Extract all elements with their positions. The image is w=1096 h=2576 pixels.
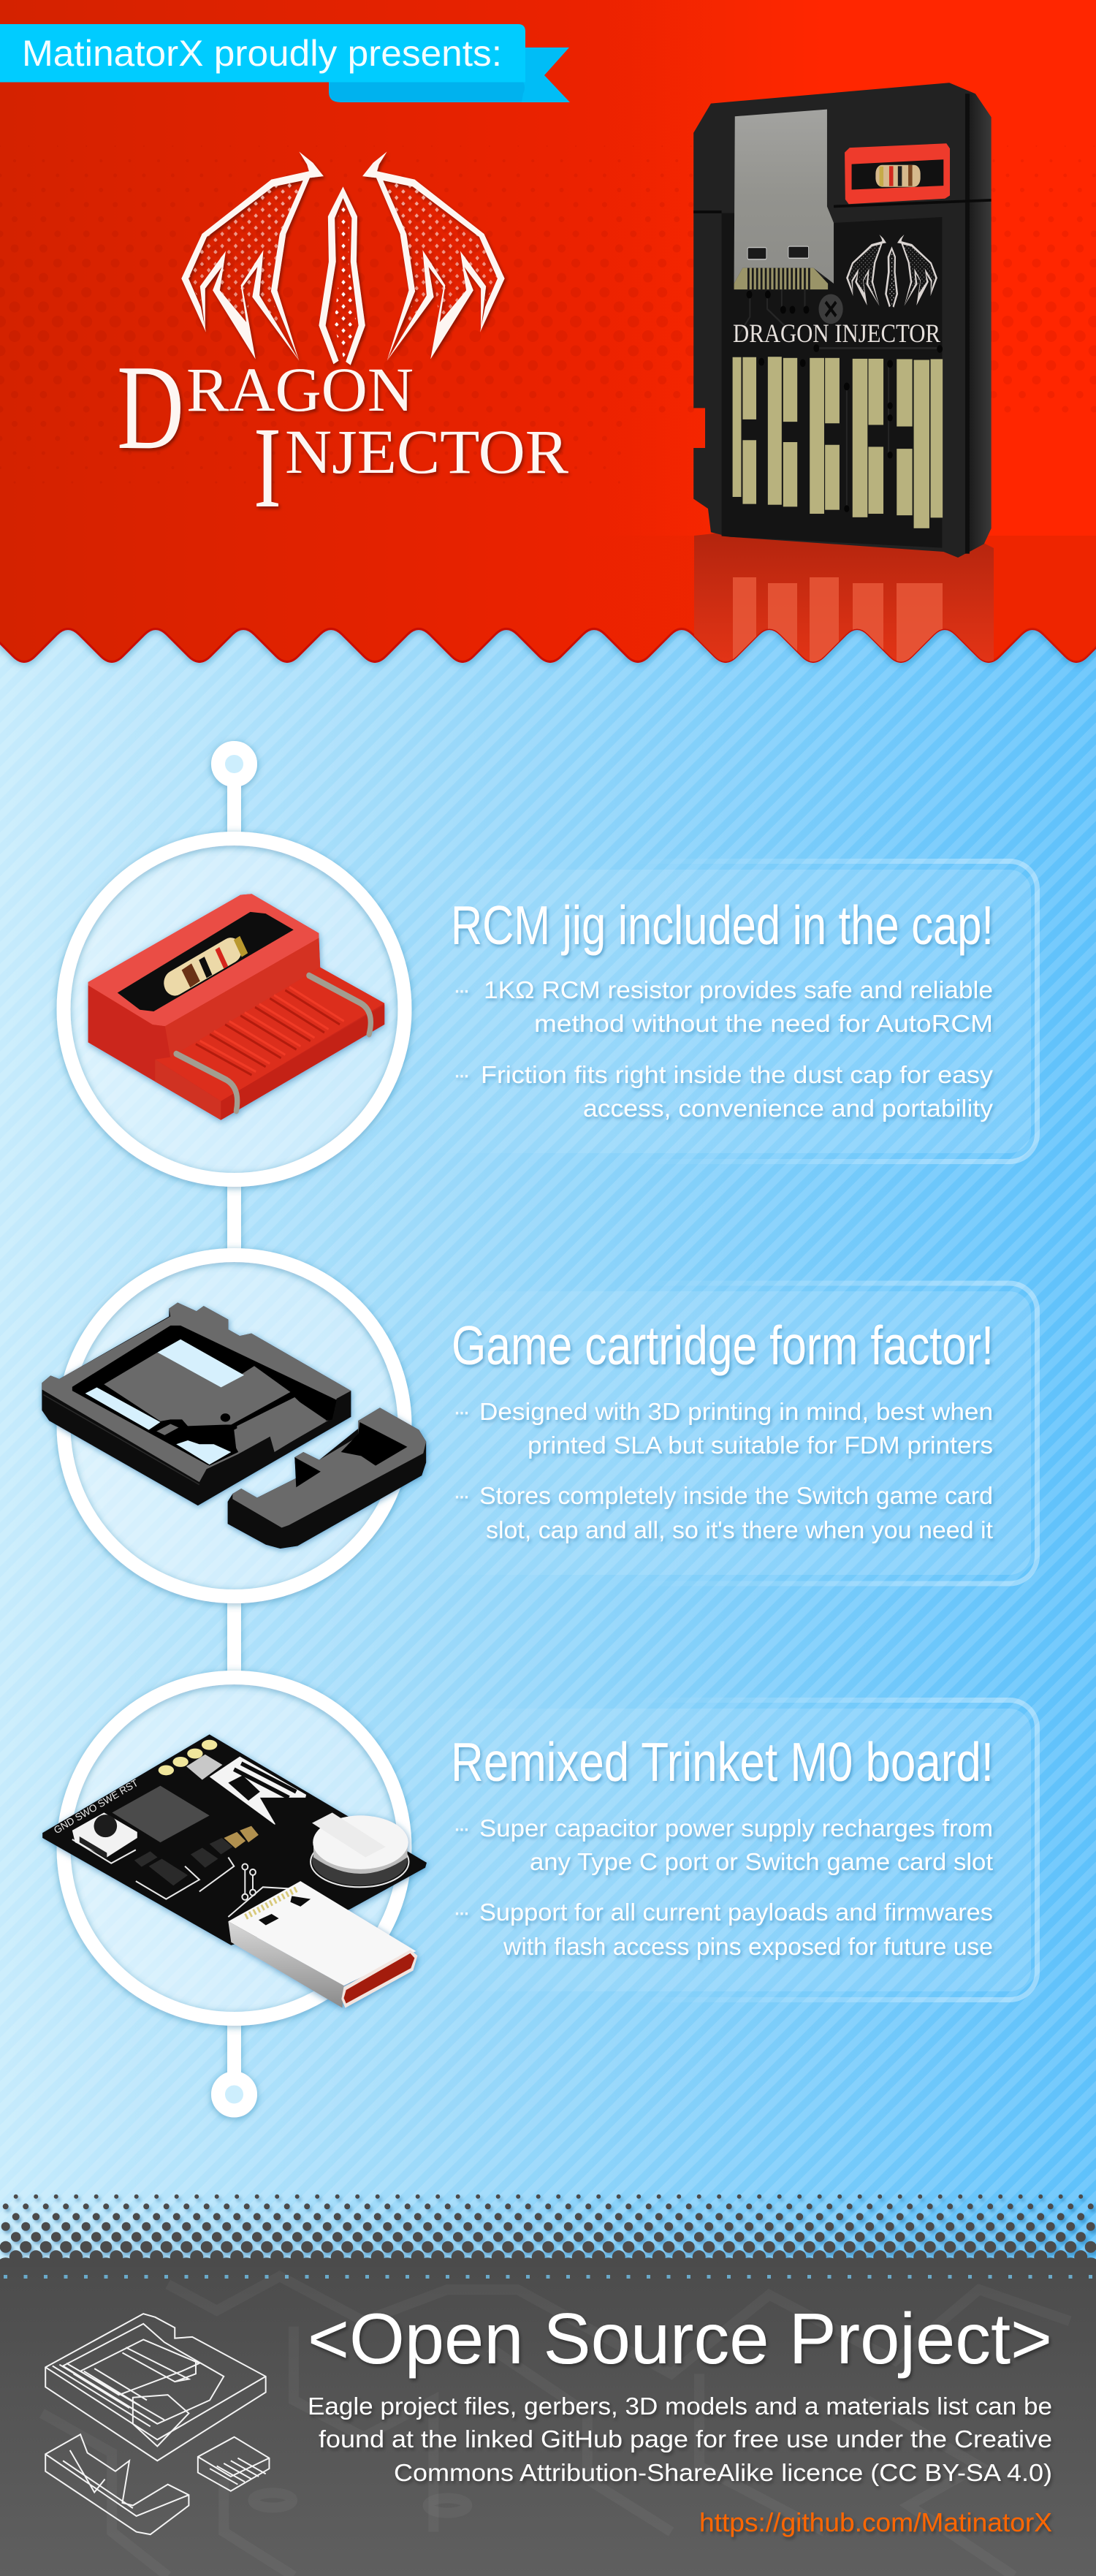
logo wordmark	[117, 340, 569, 532]
logo wordmark: D	[117, 340, 184, 474]
product render: dragon injector device	[693, 83, 992, 558]
red header band with zigzag edge	[0, 0, 1096, 662]
metal wire leads	[176, 976, 370, 1111]
main chip	[112, 1786, 210, 1842]
icon: wireframe model	[45, 2314, 269, 2534]
glossy floor and device reflection	[694, 533, 1096, 662]
circle with board render	[42, 1678, 427, 2018]
case cap part	[228, 1407, 426, 1549]
footer body text: Commons Attribution-ShareAlike licence (CC BY-SA 4.0)	[394, 2459, 1052, 2486]
panel: trinket board	[42, 1678, 1038, 2018]
ribbon banner	[0, 24, 570, 102]
panel text: game cartridge: Designed with 3D printing in mind, best when	[479, 1398, 993, 1425]
panel text: trinket board: with flash access pins exposed for future use	[503, 1933, 993, 1960]
halftone dots in header	[0, 146, 1096, 482]
bullet text: ···	[453, 1398, 471, 1425]
logo wordmark: NJECTOR	[285, 417, 569, 487]
panel text: trinket board: Super capacitor power supply recharges from	[479, 1815, 993, 1842]
circuit trace pattern	[42, 2276, 1070, 2576]
footer: open source project	[0, 2197, 1096, 2576]
panel background	[409, 1283, 1038, 1584]
bullet text: ···	[453, 1899, 471, 1926]
bullet text: ···	[453, 976, 471, 1003]
panel text: trinket board: any Type C port or Switch game card slot	[530, 1848, 993, 1875]
circle with case render	[42, 1255, 426, 1596]
bullet text: ···	[453, 1815, 471, 1842]
slide switch	[186, 1755, 306, 1828]
logo wordmark: I	[254, 403, 281, 532]
device side	[970, 94, 992, 552]
panel text: rcm jig	[451, 894, 994, 1122]
panel text: game cartridge: slot, cap and all, so it's there when you need it	[486, 1516, 993, 1543]
gold test pads	[159, 1740, 217, 1775]
smd components	[134, 1826, 259, 1885]
github link: https://github.com/MatinatorX	[699, 2507, 1052, 2537]
silkscreen labels: GND SWO SWE RST	[52, 1777, 140, 1836]
supercapacitor	[312, 1812, 408, 1885]
footer body text	[308, 2393, 1052, 2486]
usb c plug	[228, 1881, 417, 2008]
bullet text: ···	[453, 1482, 471, 1509]
panel text: rcm jig: access, convenience and portability	[583, 1095, 994, 1122]
ribbon front	[0, 24, 525, 82]
reset button	[72, 1812, 137, 1859]
icon: red jig	[88, 894, 384, 1120]
small square holes	[0, 2275, 1096, 2279]
ribbon text: MatinatorX proudly presents:	[22, 33, 502, 74]
gold contact pads	[733, 357, 943, 528]
device body	[693, 83, 992, 558]
panel: game cartridge	[42, 1255, 1037, 1596]
panel text: trinket board	[451, 1731, 994, 1960]
panel text: game cartridge	[452, 1315, 994, 1543]
panel text: game cartridge: printed SLA but suitable for FDM printers	[528, 1432, 993, 1459]
panel background	[409, 861, 1038, 1162]
heading: Remixed Trinket M0 board!	[451, 1731, 994, 1793]
footer text	[308, 2298, 1052, 2537]
logo wordmark: RAGON	[186, 354, 414, 425]
screw	[818, 294, 843, 324]
footer body text: found at the linked GitHub page for free use under the Creative	[319, 2425, 1052, 2452]
panel background	[409, 1700, 1038, 1999]
panel text: game cartridge: Stores completely inside the Switch game card	[479, 1482, 993, 1509]
line segments	[227, 775, 241, 2083]
footer body text: Eagle project files, gerbers, 3D models and a materials list can be	[308, 2393, 1052, 2420]
ribbon tail	[351, 48, 570, 102]
cap seam	[693, 200, 992, 212]
pcb	[722, 213, 942, 548]
panel text: rcm jig: method without the need for AutoRCM	[534, 1010, 993, 1037]
bullet text: ···	[453, 1061, 471, 1088]
resistor	[875, 165, 921, 187]
halftone transition	[6, 2197, 1096, 2267]
red rcm jig window	[845, 143, 950, 204]
case main part	[42, 1302, 351, 1505]
timeline connector	[218, 748, 250, 2110]
device wordmark: DRAGON INJECTOR	[733, 319, 940, 348]
panel text: rcm jig: 1KΩ RCM resistor provides safe and reliable	[484, 976, 993, 1003]
usb type c connector	[734, 110, 834, 289]
footer panel	[0, 2267, 1096, 2576]
panel text: rcm jig: Friction fits right inside the dust cap for easy	[481, 1061, 994, 1088]
top node	[218, 748, 250, 780]
device logo emblem	[846, 235, 937, 308]
circle with jig render	[64, 839, 405, 1179]
ribbon fold	[329, 82, 525, 102]
footer title: <Open Source Project>	[308, 2298, 1052, 2379]
dragon injector logo	[117, 152, 569, 532]
panel text: trinket board: Support for all current payloads and firmwares	[479, 1899, 993, 1926]
logo wings emblem	[181, 152, 505, 365]
bottom node	[218, 2078, 250, 2110]
silkscreen outlines	[72, 1836, 408, 1917]
pcb traces	[736, 289, 940, 509]
panel: rcm jig	[64, 839, 1038, 1179]
resistor	[175, 944, 244, 983]
icon: pcb board	[42, 1734, 427, 2008]
icon: black case parts	[42, 1302, 426, 1549]
